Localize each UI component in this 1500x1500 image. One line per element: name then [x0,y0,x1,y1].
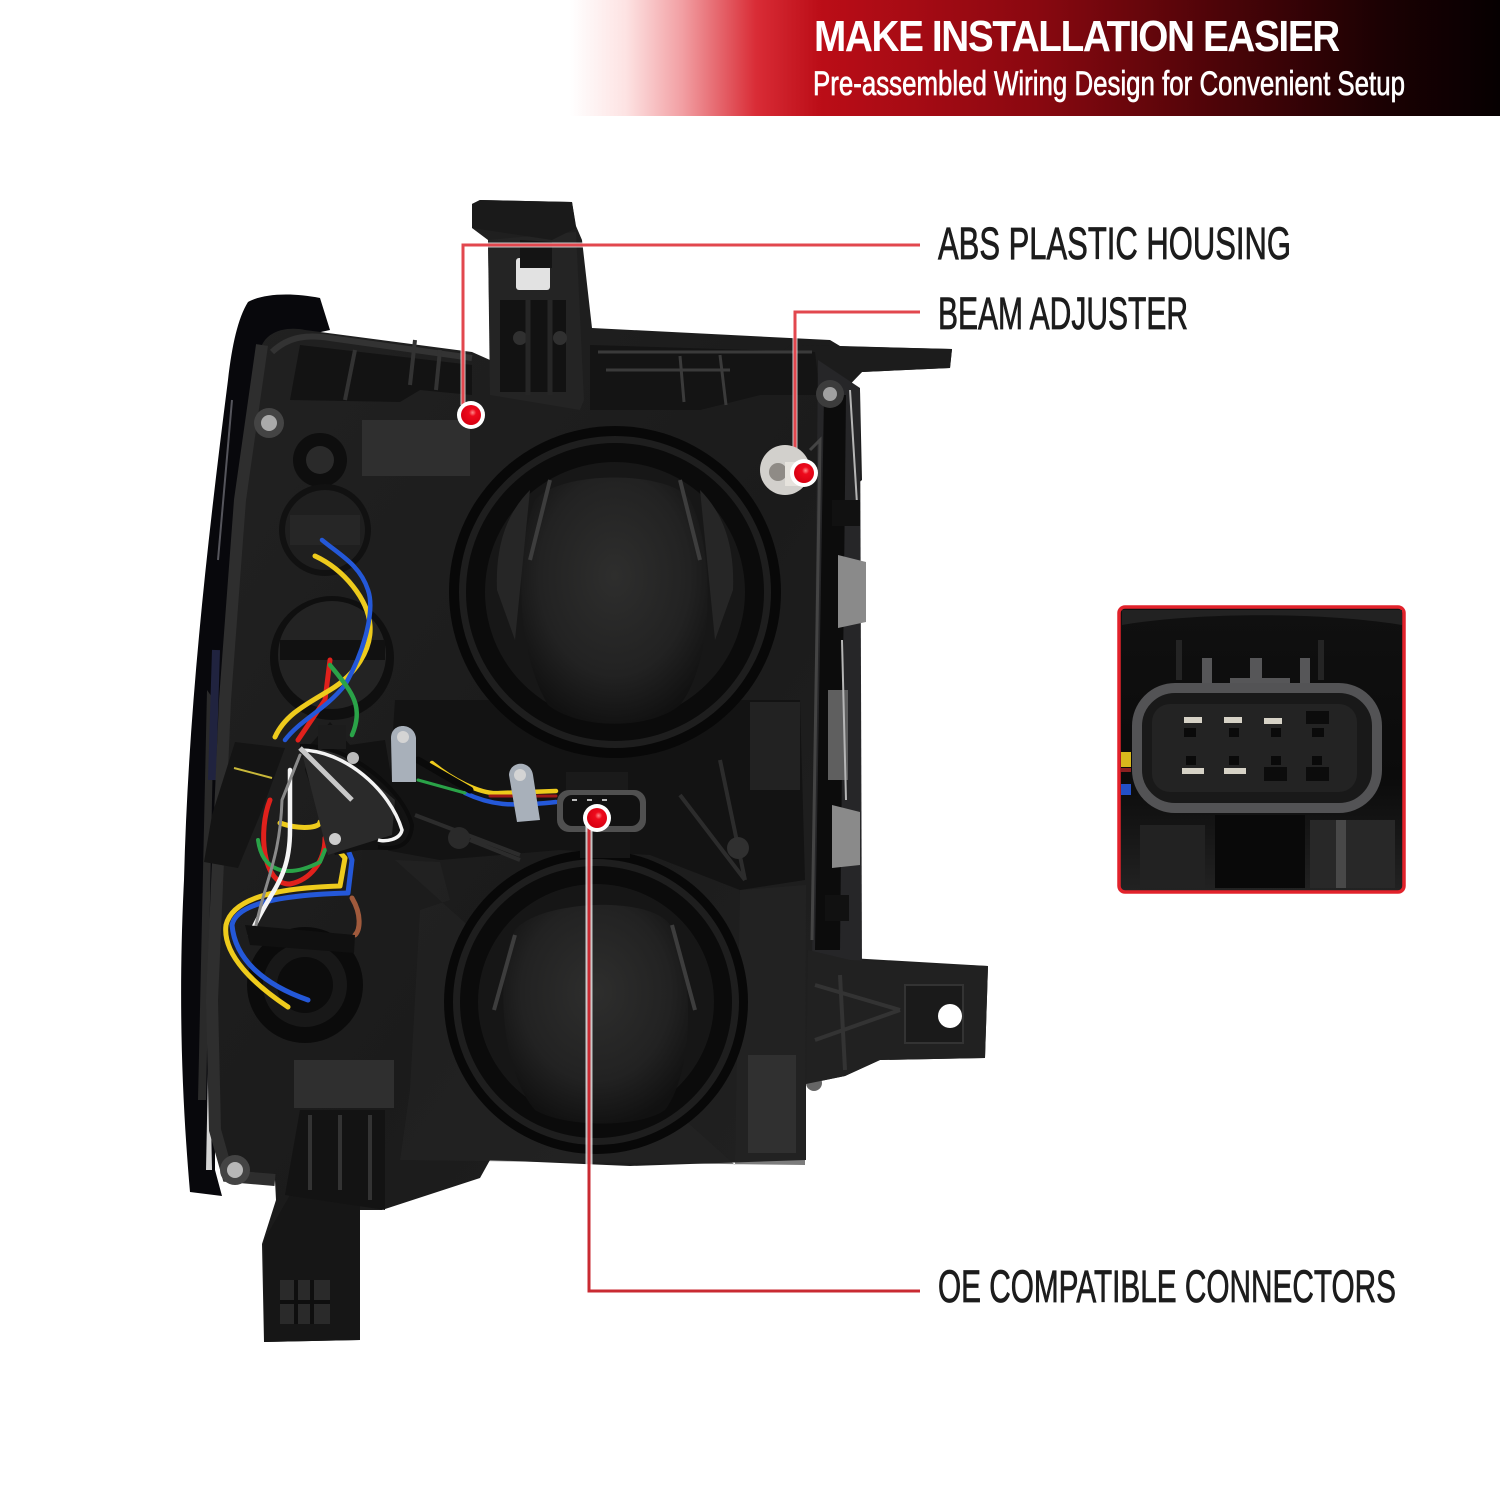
plug connector [204,742,285,868]
lower left mount [264,1110,385,1342]
marker: connector [583,804,611,832]
outer chrome trim at left [181,295,330,1196]
connector square holes [1184,728,1324,765]
top right tab [735,345,952,395]
socket 3 [247,927,363,1043]
control box [300,722,412,874]
wiring harness [226,540,556,1007]
connector pins [1182,711,1329,781]
lower body [395,860,806,1165]
headlight assembly rear view [181,200,988,1342]
metal tabs [391,726,416,782]
label: ABS plastic housing: ABS PLASTIC HOUSING [938,218,1291,269]
lower plug [245,925,355,953]
marker: adjuster [790,459,818,487]
middle dark recess [385,700,805,890]
right side clear clips [812,360,862,970]
socket 2 [270,596,394,720]
inset: connector close-up [1119,607,1404,892]
lower wires [226,850,345,1007]
main housing [212,200,988,1342]
marker: housing [457,401,485,429]
screws [220,380,844,1185]
lower right bracket [806,950,988,1084]
connector pins tabs [1202,658,1310,690]
upper bracket [472,200,584,410]
horizontal wires [432,763,556,793]
left panel details [362,420,470,476]
banner [570,0,1500,116]
wire stubs [1121,752,1131,767]
beam adjuster knob [760,445,810,495]
wiring connector on housing [557,772,646,858]
housing rim [212,345,275,1180]
top-left moulding [290,345,472,402]
connector shell [1137,688,1377,808]
socket 1 [279,484,371,576]
lower lens [444,850,748,1154]
upper lens [449,426,781,758]
label: beam adjuster: BEAM ADJUSTER [938,288,1188,339]
banner title: MAKE INSTALLATION EASIER [814,11,1340,61]
leader lines [463,245,920,1291]
